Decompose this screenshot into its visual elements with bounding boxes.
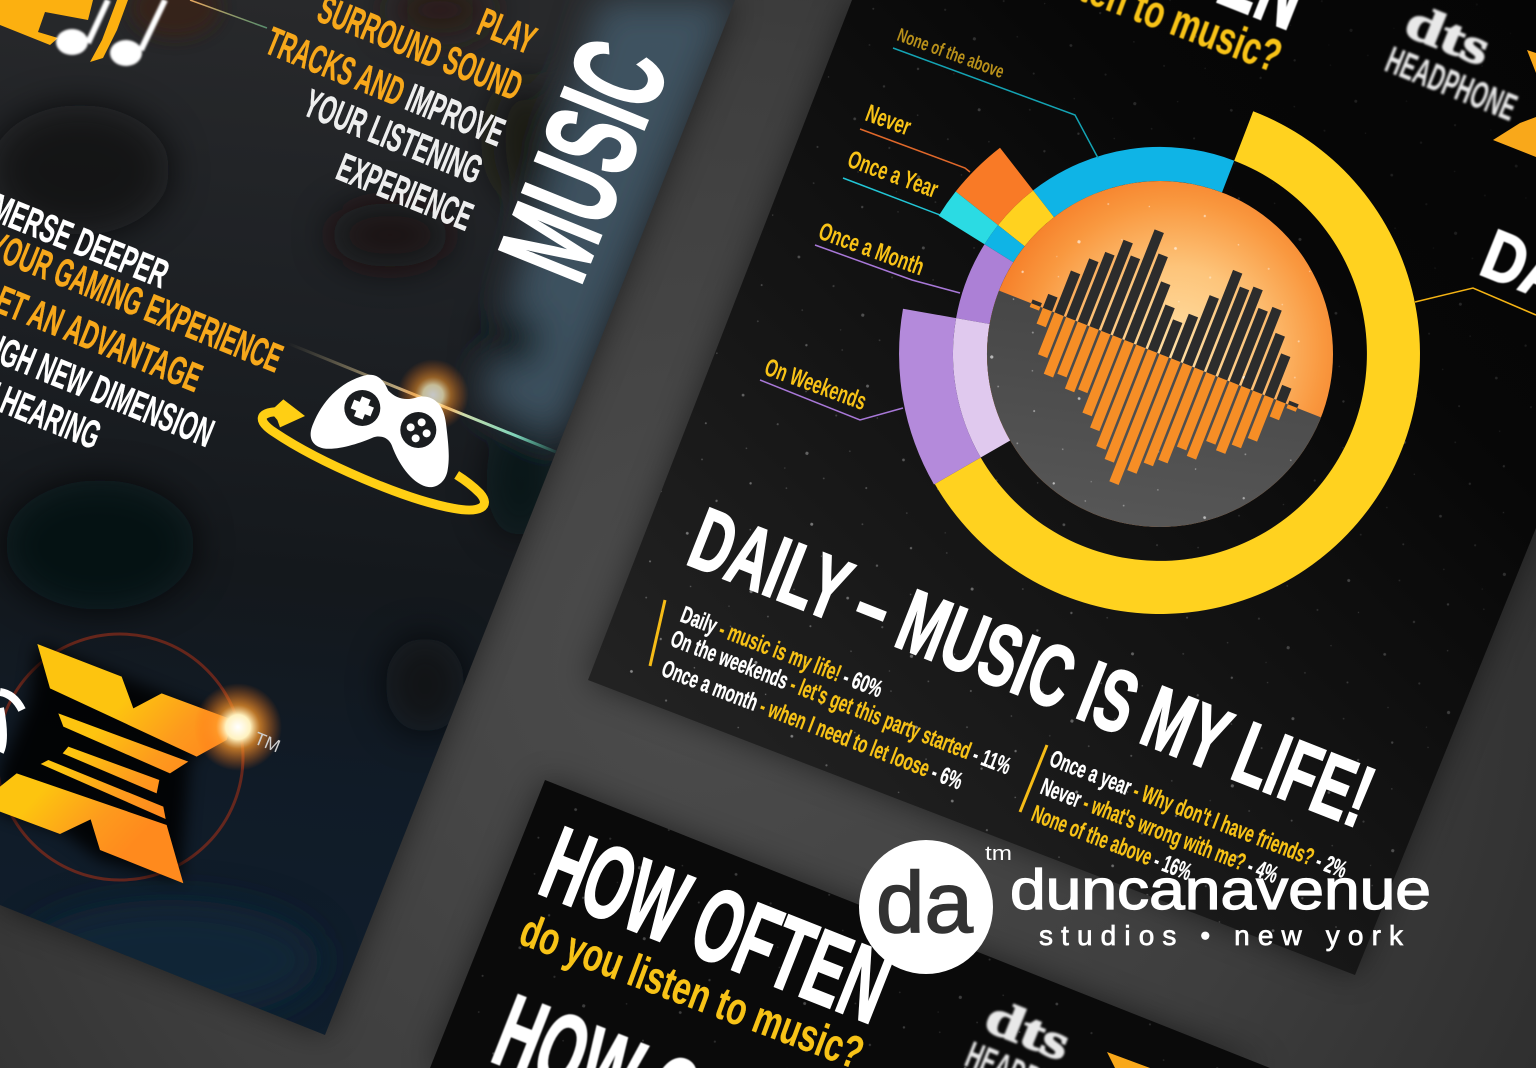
stats list right: Once a year - Why don't I have friends? - 2% (1046, 745, 1351, 884)
segment: on weekends outer (899, 309, 981, 484)
dts headphone logo (1383, 7, 1520, 122)
stats list right (1020, 745, 1351, 889)
segment: never outer (956, 148, 1033, 225)
DTS X logo (0, 634, 283, 883)
segment: once a year outer (939, 192, 998, 244)
upper light streak (130, 0, 267, 38)
panel: bottom poster how often (420, 770, 1280, 1068)
logo mark fragment (1107, 1052, 1150, 1068)
stats list right: None of the above - 16% (1028, 800, 1195, 886)
panel: center poster daily music (580, 0, 1536, 980)
label: never: Never (862, 99, 915, 141)
icon: game controller with orbit arrow (262, 375, 484, 510)
top heading fragment (1080, 0, 1299, 71)
dts headphone logo (960, 987, 1102, 1068)
trademark: tm (985, 843, 1012, 865)
music promo text (260, 0, 542, 240)
segment: on weekends inner (953, 318, 1010, 458)
sound wave bars (1030, 229, 1299, 485)
segment: once a year inner (984, 225, 1025, 262)
yellow leader line (1415, 288, 1536, 315)
stats list left (650, 600, 1014, 795)
music promo text: YOUR LISTENING (298, 82, 488, 193)
segment: daily 60% (935, 111, 1420, 614)
stats list left: On the weekends - let's get this party started - 11% (667, 625, 1014, 780)
gaming promo text (0, 194, 285, 448)
segment: never inner (998, 190, 1054, 246)
disc: sky and ground (987, 181, 1333, 527)
label: once a year: Once a Year (844, 145, 942, 204)
chart labels and leader lines (760, 25, 1098, 420)
label: on weekends: On Weekends (761, 353, 870, 416)
dts headphone logo: dts (978, 987, 1079, 1068)
label: on weekends (760, 353, 903, 420)
logo badge (859, 840, 993, 974)
panel: left gaming and music poster (0, 0, 740, 1040)
logo badge: da (876, 855, 973, 951)
rocks and space scenery (0, 0, 735, 1020)
label: none of the above (893, 25, 1098, 158)
segment: none of the above 16% (1033, 147, 1234, 217)
tagline: studios • new york (1039, 920, 1404, 951)
DTS X logo: TM (252, 728, 283, 756)
music promo text: EXPERIENCE (331, 146, 479, 240)
wordmark: duncanavenue (1010, 858, 1431, 922)
label: once a year (843, 145, 942, 215)
logo: duncanavenue studios new york (859, 840, 1431, 974)
music promo text: TRACKS AND IMPROVE (260, 20, 511, 155)
icon: music notes with yellow logo fragment (0, 0, 165, 66)
light streak with flare (287, 343, 556, 452)
stats list left: Daily - music is my life! - 60% (677, 601, 886, 703)
segment: once a month (956, 244, 1013, 324)
stats list right: Never - what's wrong with me? - 4% (1037, 773, 1282, 889)
chart: radial music frequency donut (899, 111, 1420, 614)
stats list left: Once a month - when I need to let loose - 6% (658, 655, 966, 795)
label: none of the above: None of the above (894, 25, 1007, 83)
logo mark fragment top right (1493, 50, 1536, 157)
label: never (860, 99, 970, 172)
music promo text: PLAY (472, 1, 542, 63)
label: once a month: Once a Month (815, 217, 928, 281)
